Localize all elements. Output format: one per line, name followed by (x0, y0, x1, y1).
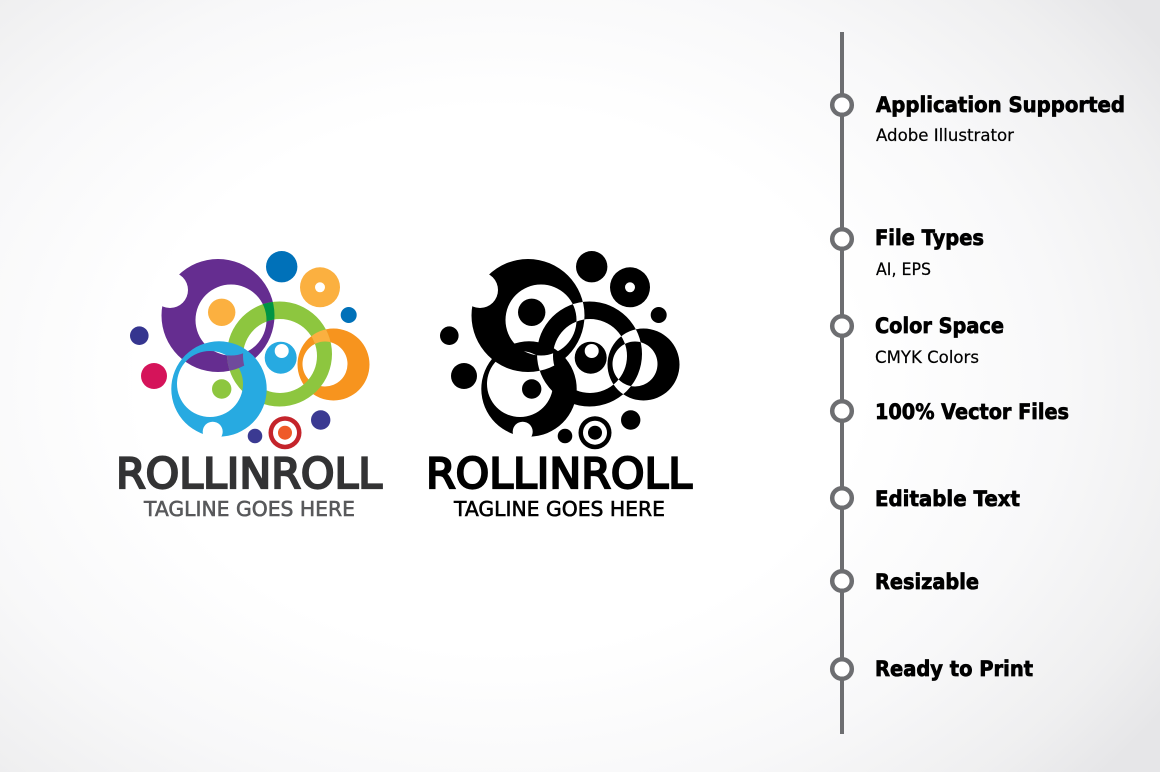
icon: black dots (440, 251, 667, 449)
item: file types: AI, EPS (876, 260, 931, 279)
item: editable text: Editable Text (875, 487, 1020, 511)
timeline (832, 32, 852, 734)
icon: purple ring (152, 259, 274, 372)
item: vector files: 100% Vector Files (875, 400, 1069, 424)
icon: green and orange overlap (311, 330, 330, 344)
item: file types (875, 226, 984, 279)
tagline: TAGLINE GOES HERE (453, 497, 665, 521)
item: color space: Color Space (875, 314, 1004, 338)
colour logo (116, 251, 383, 521)
item: application supported: Application Supported (876, 93, 1125, 117)
timeline nodes (832, 95, 852, 679)
item: application supported: Adobe Illustrator (876, 126, 1014, 145)
icon: orange ring (298, 328, 370, 400)
timeline line (840, 32, 844, 734)
icon: dots (130, 251, 357, 443)
black logo (426, 251, 693, 521)
item: resizable: Resizable (875, 570, 979, 594)
icon: purple and green overlap (227, 302, 274, 371)
icon: green ring (227, 302, 332, 407)
item: file types: File Types (875, 226, 984, 250)
feature list (875, 93, 1125, 681)
tagline: TAGLINE GOES HERE (143, 497, 355, 521)
item: ready to print: Ready to Print (875, 657, 1033, 681)
brand name: ROLLINROLL (116, 449, 383, 498)
icon: target (268, 416, 302, 449)
brand name: ROLLINROLL (426, 449, 693, 498)
item: color space: CMYK Colors (875, 348, 979, 367)
icon: black rings (462, 259, 680, 442)
item: application supported (876, 93, 1125, 145)
icon: blue ring (171, 341, 267, 442)
item: color space (875, 314, 1004, 367)
